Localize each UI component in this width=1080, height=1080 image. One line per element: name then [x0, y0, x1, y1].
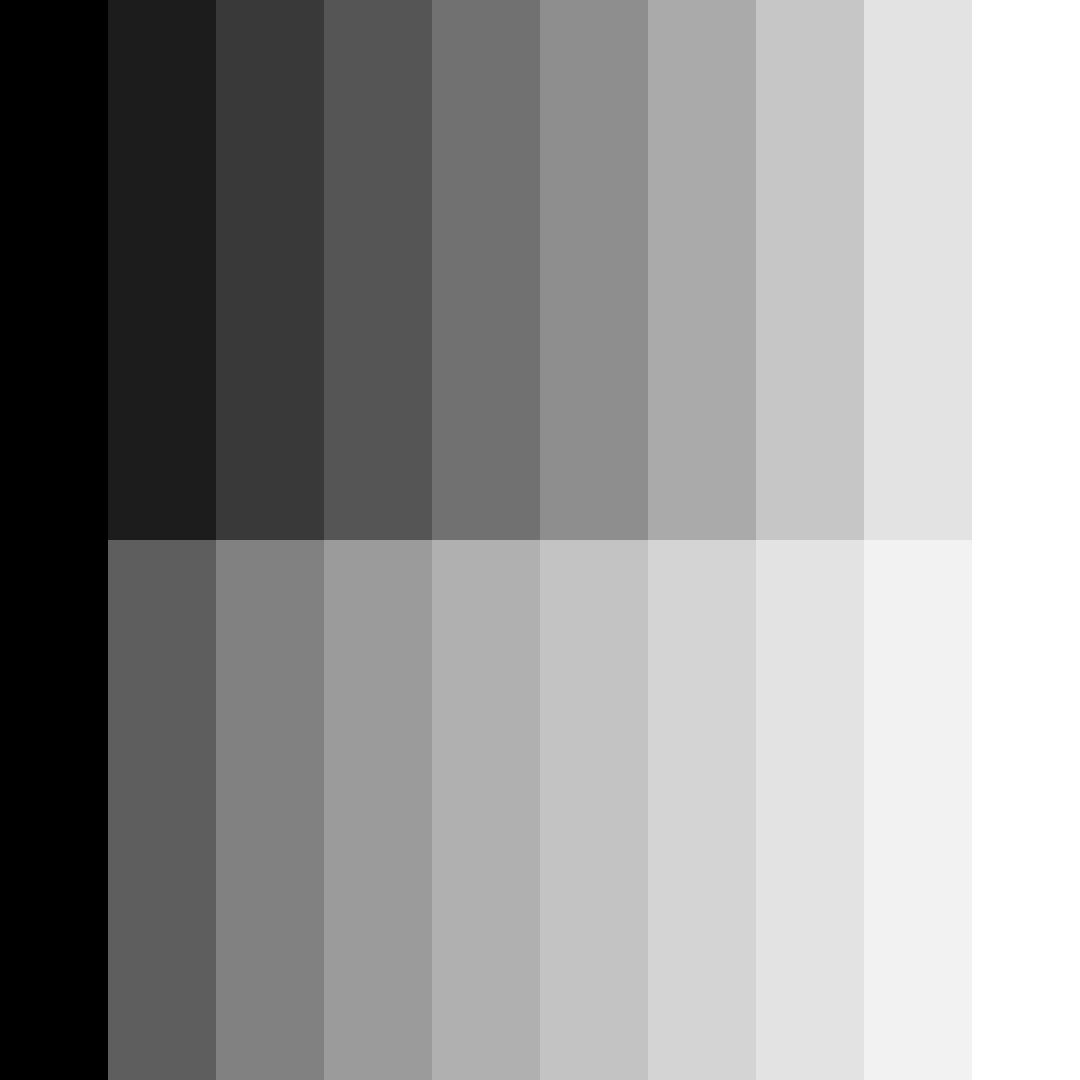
panel: gamma-corrected grayscale ramp (bottom row)	[0, 540, 972, 1080]
panel: linear grayscale ramp (top row)	[0, 0, 972, 540]
